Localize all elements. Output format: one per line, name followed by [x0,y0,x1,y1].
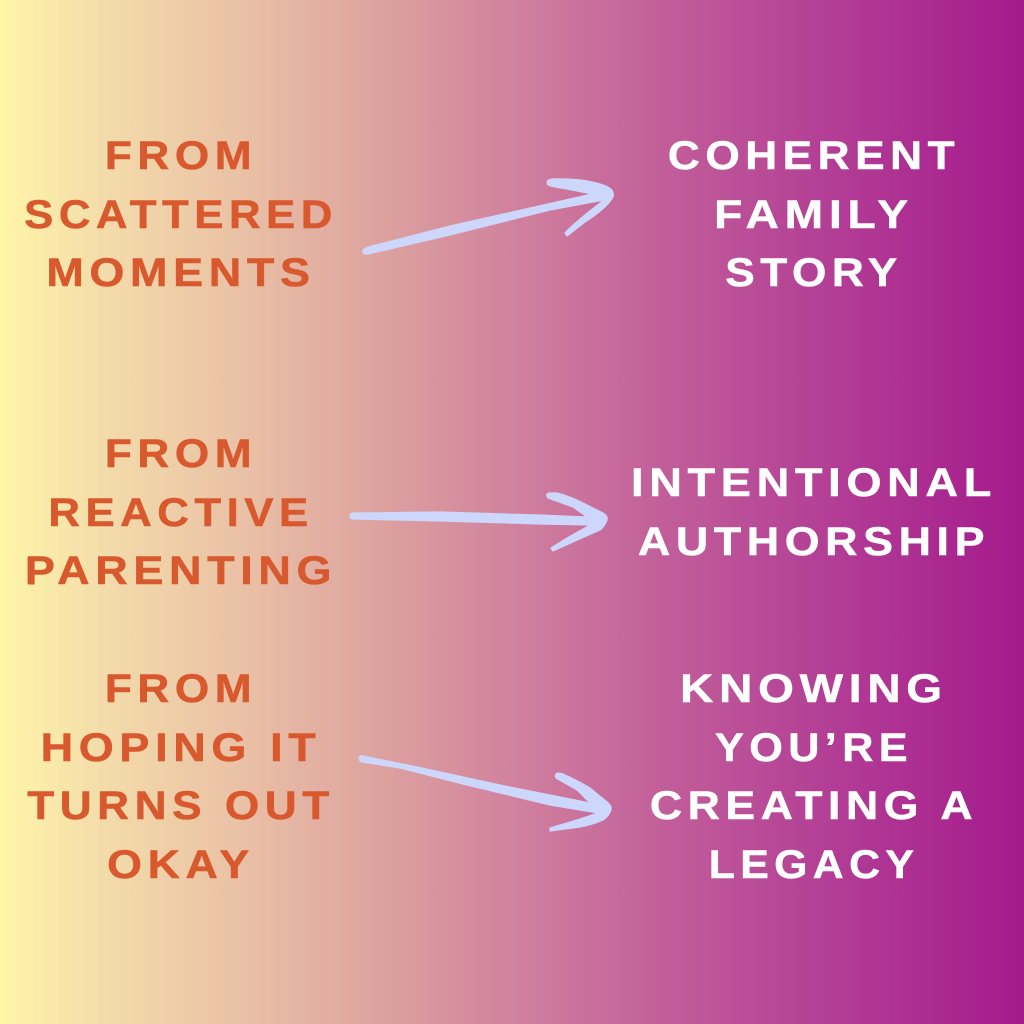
left text: reactive parenting [25,432,337,593]
right text: coherent family story [668,134,960,295]
left text: hoping it turns out okay: HOPING IT [41,726,321,770]
right text: intentional authorship [631,461,997,564]
right text: coherent family story: FAMILY [714,192,914,236]
left text: hoping it turns out okay: TURNS OUT [27,784,335,828]
left text: reactive parenting: FROM [105,432,257,476]
right text: knowing you're creating a legacy: KNOWING [680,667,948,711]
left text: reactive parenting: PARENTING [25,549,337,593]
left text: scattered moments: FROM [105,134,257,178]
arrow 1 [363,179,613,254]
right text: knowing you're creating a legacy [650,667,978,886]
right text: knowing you're creating a legacy: CREATING A [650,784,978,828]
right text: coherent family story: COHERENT [668,134,960,178]
right text: intentional authorship: INTENTIONAL [631,461,997,505]
left text: hoping it turns out okay [27,667,335,886]
right text: intentional authorship: AUTHORSHIP [638,520,990,564]
right text: coherent family story: STORY [725,251,903,295]
left text: hoping it turns out okay: OKAY [107,842,255,886]
arrow 2 [350,493,607,551]
left text: reactive parenting: REACTIVE [48,490,314,534]
left text: scattered moments [24,134,338,295]
left text: scattered moments: MOMENTS [46,251,316,295]
arrow 3 [359,756,611,831]
right text: knowing you're creating a legacy: LEGACY [709,842,919,886]
left text: hoping it turns out okay: FROM [105,667,257,711]
left text: scattered moments: SCATTERED [24,192,338,236]
right text: knowing you're creating a legacy: YOU’RE [715,726,913,770]
